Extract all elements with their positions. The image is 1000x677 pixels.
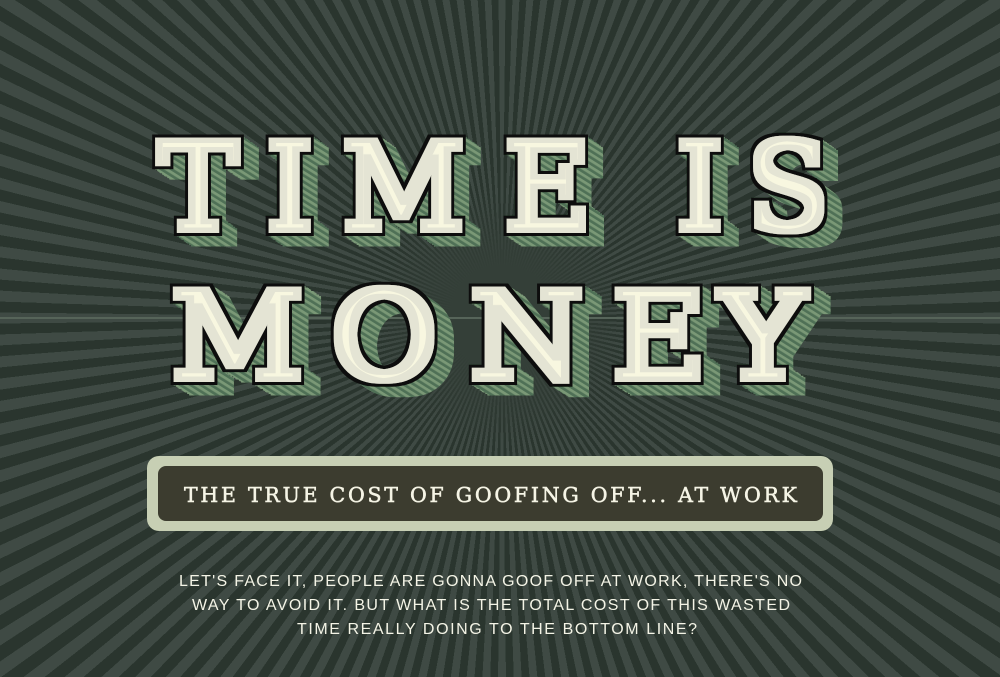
intro paragraph	[179, 573, 802, 638]
center horizontal glint	[0, 317, 1000, 319]
title shadow: hatched extrusion	[155, 137, 842, 398]
intro paragraph: WAY TO AVOID IT. BUT WHAT IS THE TOTAL COST OF THIS WASTED	[192, 597, 790, 614]
subtitle banner	[147, 456, 833, 531]
intro paragraph: TIME REALLY DOING TO THE BOTTOM LINE?	[297, 621, 697, 638]
title	[158, 119, 829, 407]
title: TIMEIS	[158, 119, 829, 258]
intro paragraph: LET'S FACE IT, PEOPLE ARE GONNA GOOF OFF AT WORK, THERE'S NO	[179, 573, 802, 590]
title: MONEY	[171, 268, 807, 407]
subtitle banner: THE TRUE COST OF GOOFING OFF... AT WORK	[184, 483, 798, 507]
